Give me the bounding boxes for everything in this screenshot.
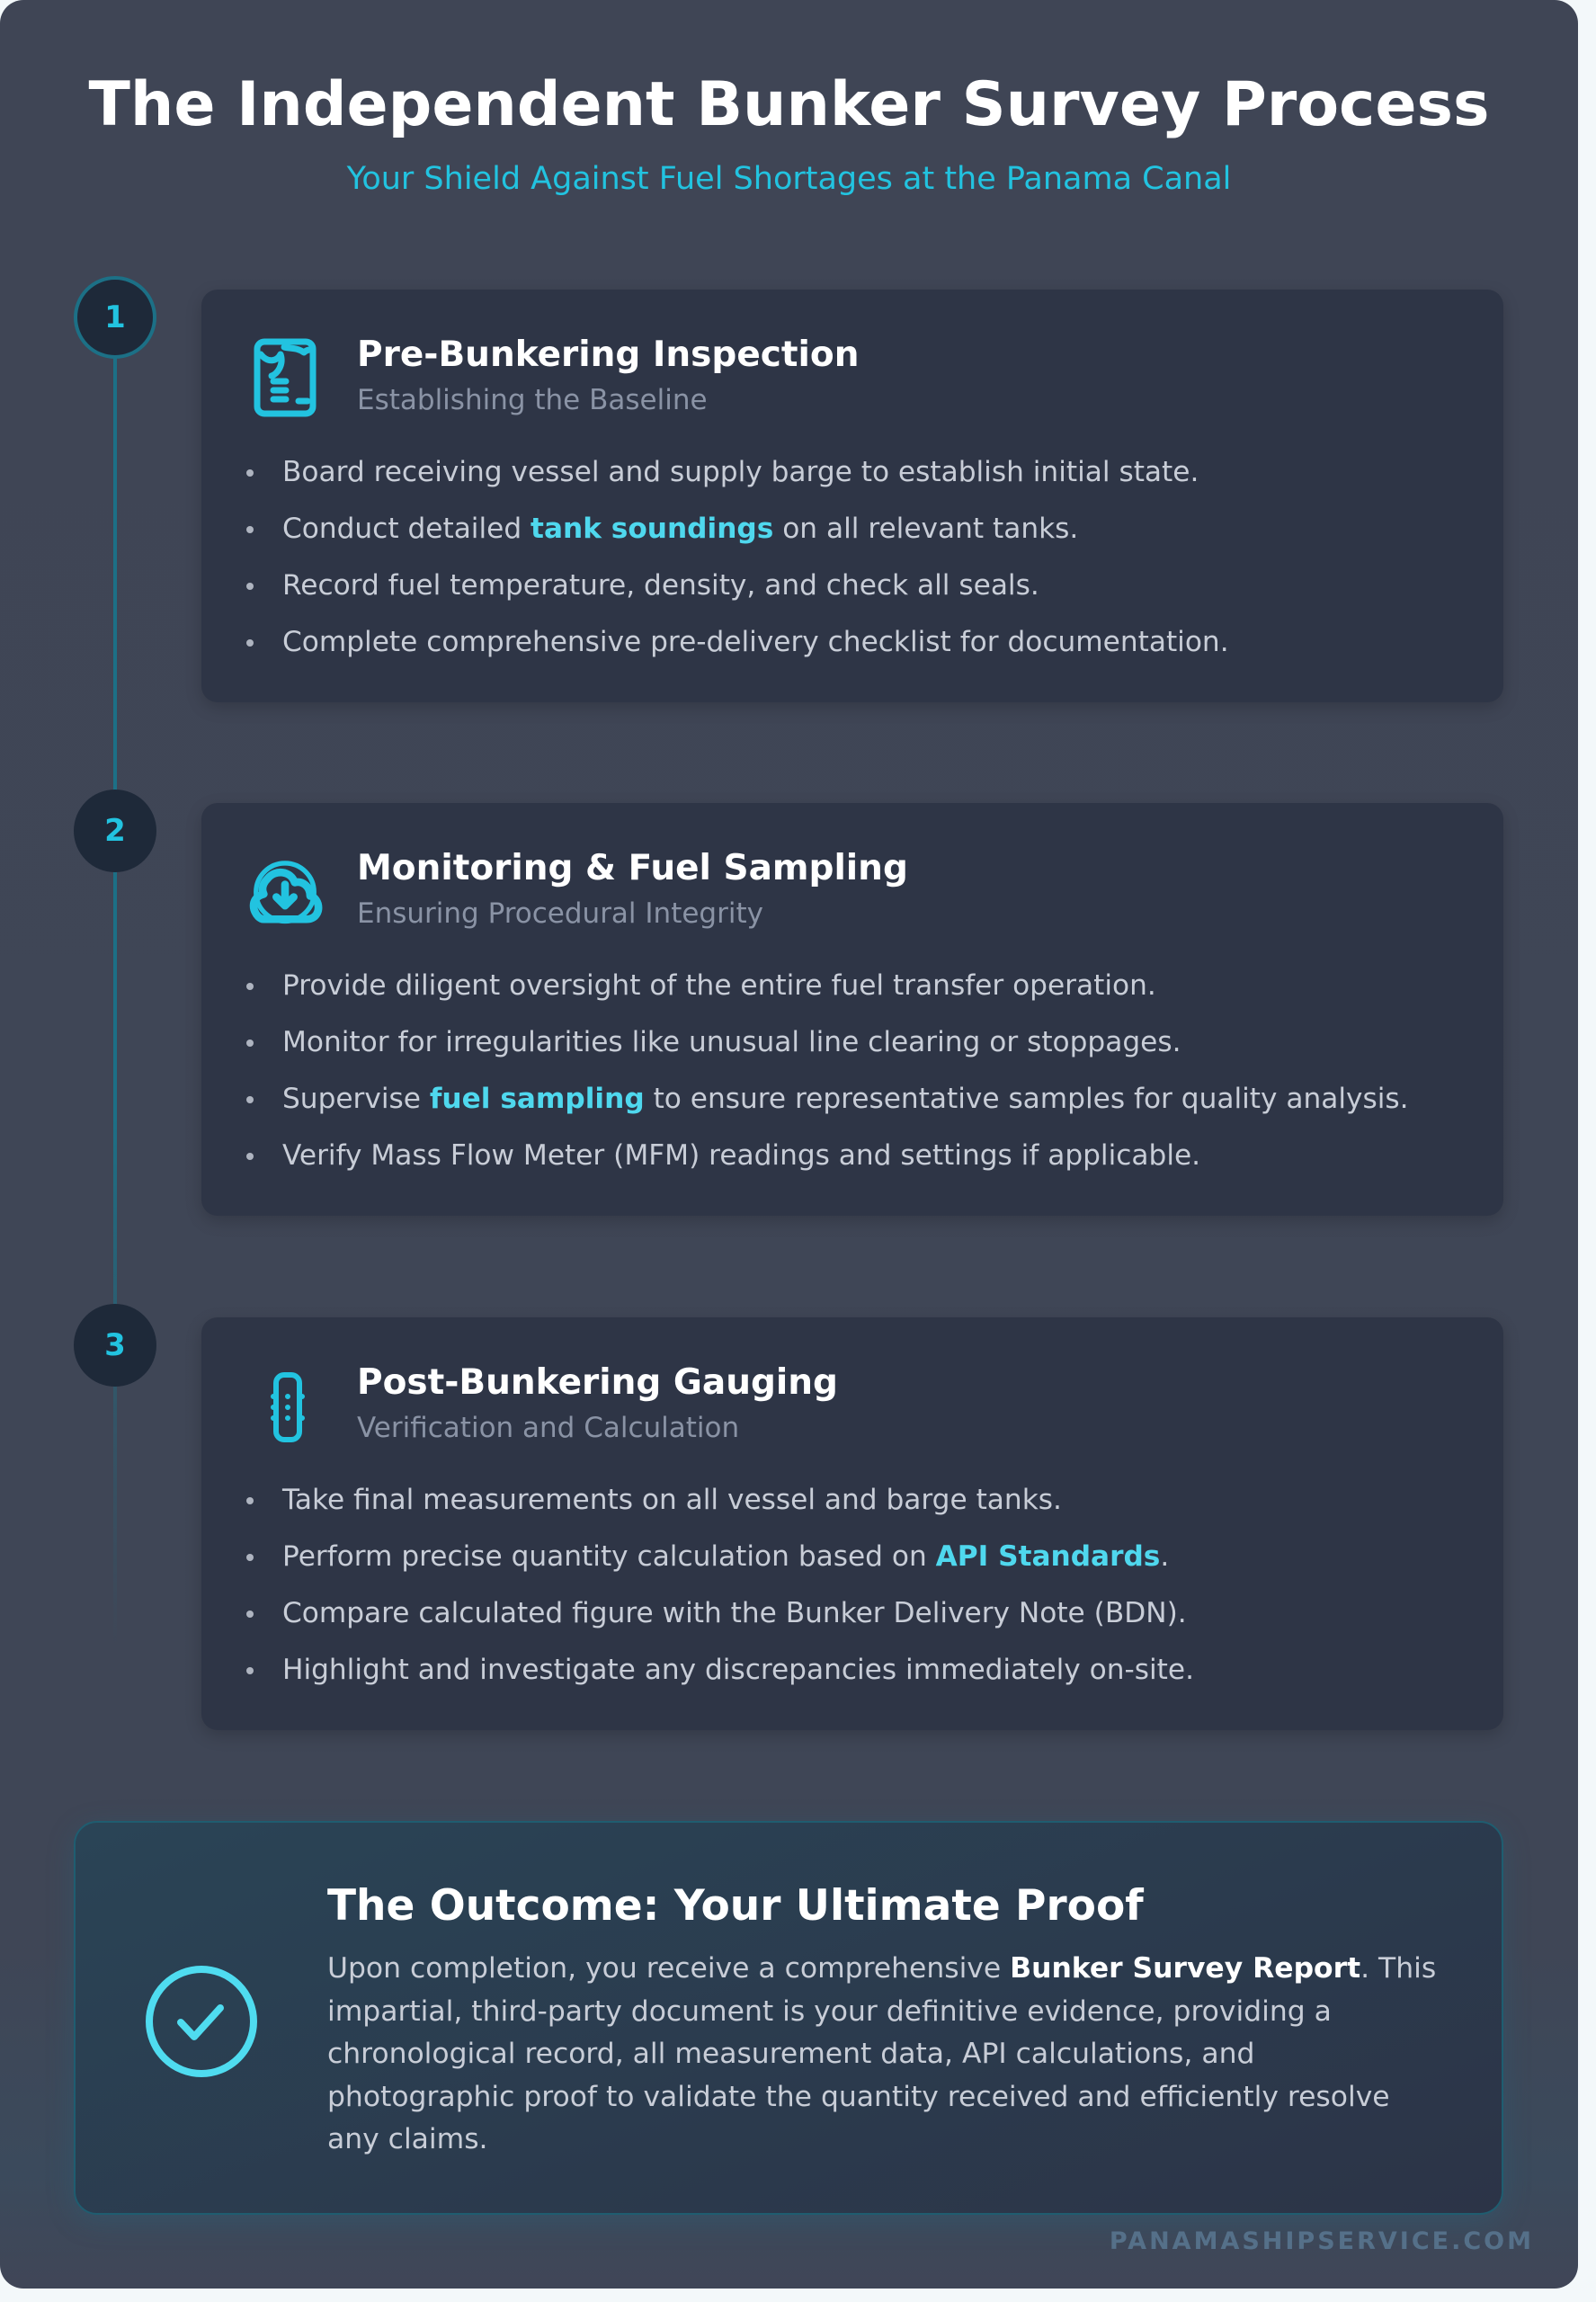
bullet list <box>246 969 1409 1172</box>
icon: clipboard <box>254 338 317 417</box>
bullet list: Highlight and investigate any discrepancies immediately on-site. <box>282 1654 1194 1686</box>
bullet list: Conduct detailed tank soundings on all relevant tanks. <box>282 513 1078 545</box>
step circle 3: 3 <box>104 1327 126 1363</box>
panel: step 2 <box>201 803 1503 1216</box>
outcome text: Upon completion, you receive a comprehensive Bunker Survey Report. This impartial, third-party document is your definitive evidence, providing a chronological record, all measurement data, API calculations, and photographic proof to validate the quantity received and efficiently resolve any claims. <box>327 1952 1436 2155</box>
bullet list: Compare calculated figure with the Bunker Delivery Note (BDN). <box>282 1597 1187 1629</box>
heading: Monitoring & Fuel Sampling <box>357 848 908 888</box>
bullet list: Monitor for irregularities like unusual line clearing or stoppages. <box>282 1026 1181 1058</box>
subheading: Ensuring Procedural Integrity <box>357 897 763 930</box>
bullet list: Complete comprehensive pre-delivery checklist for documentation. <box>282 626 1229 658</box>
title: The Independent Bunker Survey Process <box>89 69 1489 140</box>
icon: cloud download <box>250 861 322 924</box>
footer: PANAMASHIPSERVICE.COM <box>1110 2227 1534 2255</box>
step circle 1 <box>74 276 156 359</box>
step circle 1: 1 <box>104 299 126 335</box>
panel: outcome <box>74 1821 1503 2215</box>
bullet list: Board receiving vessel and supply barge to establish initial state. <box>282 456 1199 488</box>
timeline line <box>113 317 117 1648</box>
subtitle: Your Shield Against Fuel Shortages at the Panama Canal <box>347 161 1231 197</box>
bullet list: Record fuel temperature, density, and check all seals. <box>282 569 1039 602</box>
icon: gauge <box>271 1372 305 1442</box>
step circle 3 <box>74 1304 156 1387</box>
heading: Pre-Bunkering Inspection <box>357 335 859 375</box>
subheading: Verification and Calculation <box>357 1412 739 1444</box>
bullet list <box>246 456 1229 658</box>
bullet list <box>246 1484 1194 1686</box>
bullet list: Supervise fuel sampling to ensure representative samples for quality analysis. <box>282 1083 1409 1115</box>
bullet list: Verify Mass Flow Meter (MFM) readings and settings if applicable. <box>282 1139 1200 1172</box>
bullet list: Perform precise quantity calculation based on API Standards. <box>282 1540 1169 1573</box>
heading: Post-Bunkering Gauging <box>357 1362 838 1403</box>
panel: step 1 <box>201 290 1503 702</box>
step circle 2: 2 <box>104 813 126 849</box>
panel: step 3 <box>201 1317 1503 1730</box>
icon: check circle <box>146 1966 257 2077</box>
bullet list: Take final measurements on all vessel and barge tanks. <box>282 1484 1062 1516</box>
outcome heading: The Outcome: Your Ultimate Proof <box>327 1881 1144 1931</box>
subheading: Establishing the Baseline <box>357 384 708 416</box>
step circle 2 <box>74 790 156 872</box>
bullet list: Provide diligent oversight of the entire fuel transfer operation. <box>282 969 1156 1002</box>
